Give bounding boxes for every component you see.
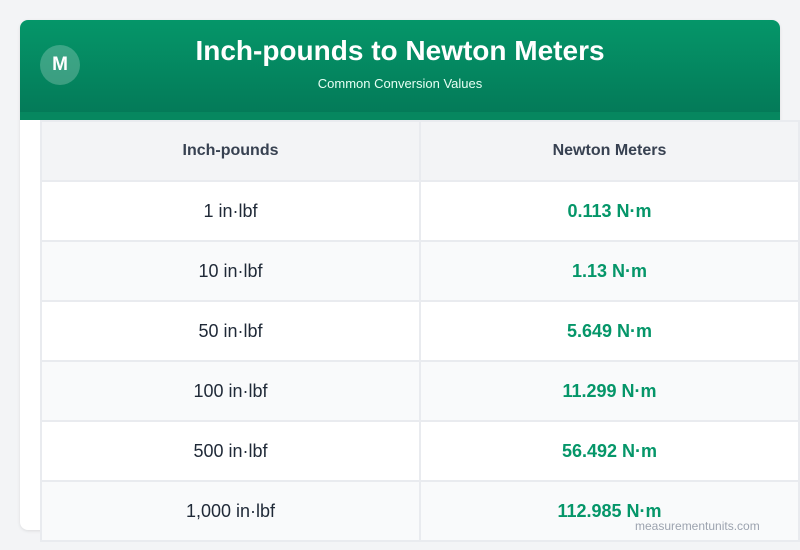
- conversion table: [40, 120, 800, 542]
- conversion table: Inch-pounds: [182, 142, 278, 159]
- subtitle: Common Conversion Values: [318, 76, 482, 91]
- conversion table: 500 in·lbf: [193, 440, 268, 460]
- logo icon: [40, 45, 80, 85]
- watermark: measurementunits.com: [635, 519, 760, 533]
- conversion table: 1.13 N·m: [572, 260, 647, 280]
- conversion table: 112.985 N·m: [557, 500, 662, 520]
- conversion table: 0.113 N·m: [567, 200, 652, 220]
- conversion table: 56.492 N·m: [562, 440, 657, 460]
- conversion table: 10 in·lbf: [198, 260, 263, 280]
- conversion table: 1,000 in·lbf: [186, 500, 275, 520]
- conversion table: Newton Meters: [553, 142, 666, 159]
- logo icon: M: [52, 54, 68, 75]
- conversion table: 11.299 N·m: [562, 380, 657, 400]
- conversion table: 1 in·lbf: [203, 200, 258, 220]
- conversion table: 5.649 N·m: [567, 320, 652, 340]
- conversion table: 50 in·lbf: [198, 320, 263, 340]
- conversion table: 100 in·lbf: [193, 380, 268, 400]
- title: Inch-pounds to Newton Meters: [195, 35, 605, 66]
- header: [20, 20, 780, 120]
